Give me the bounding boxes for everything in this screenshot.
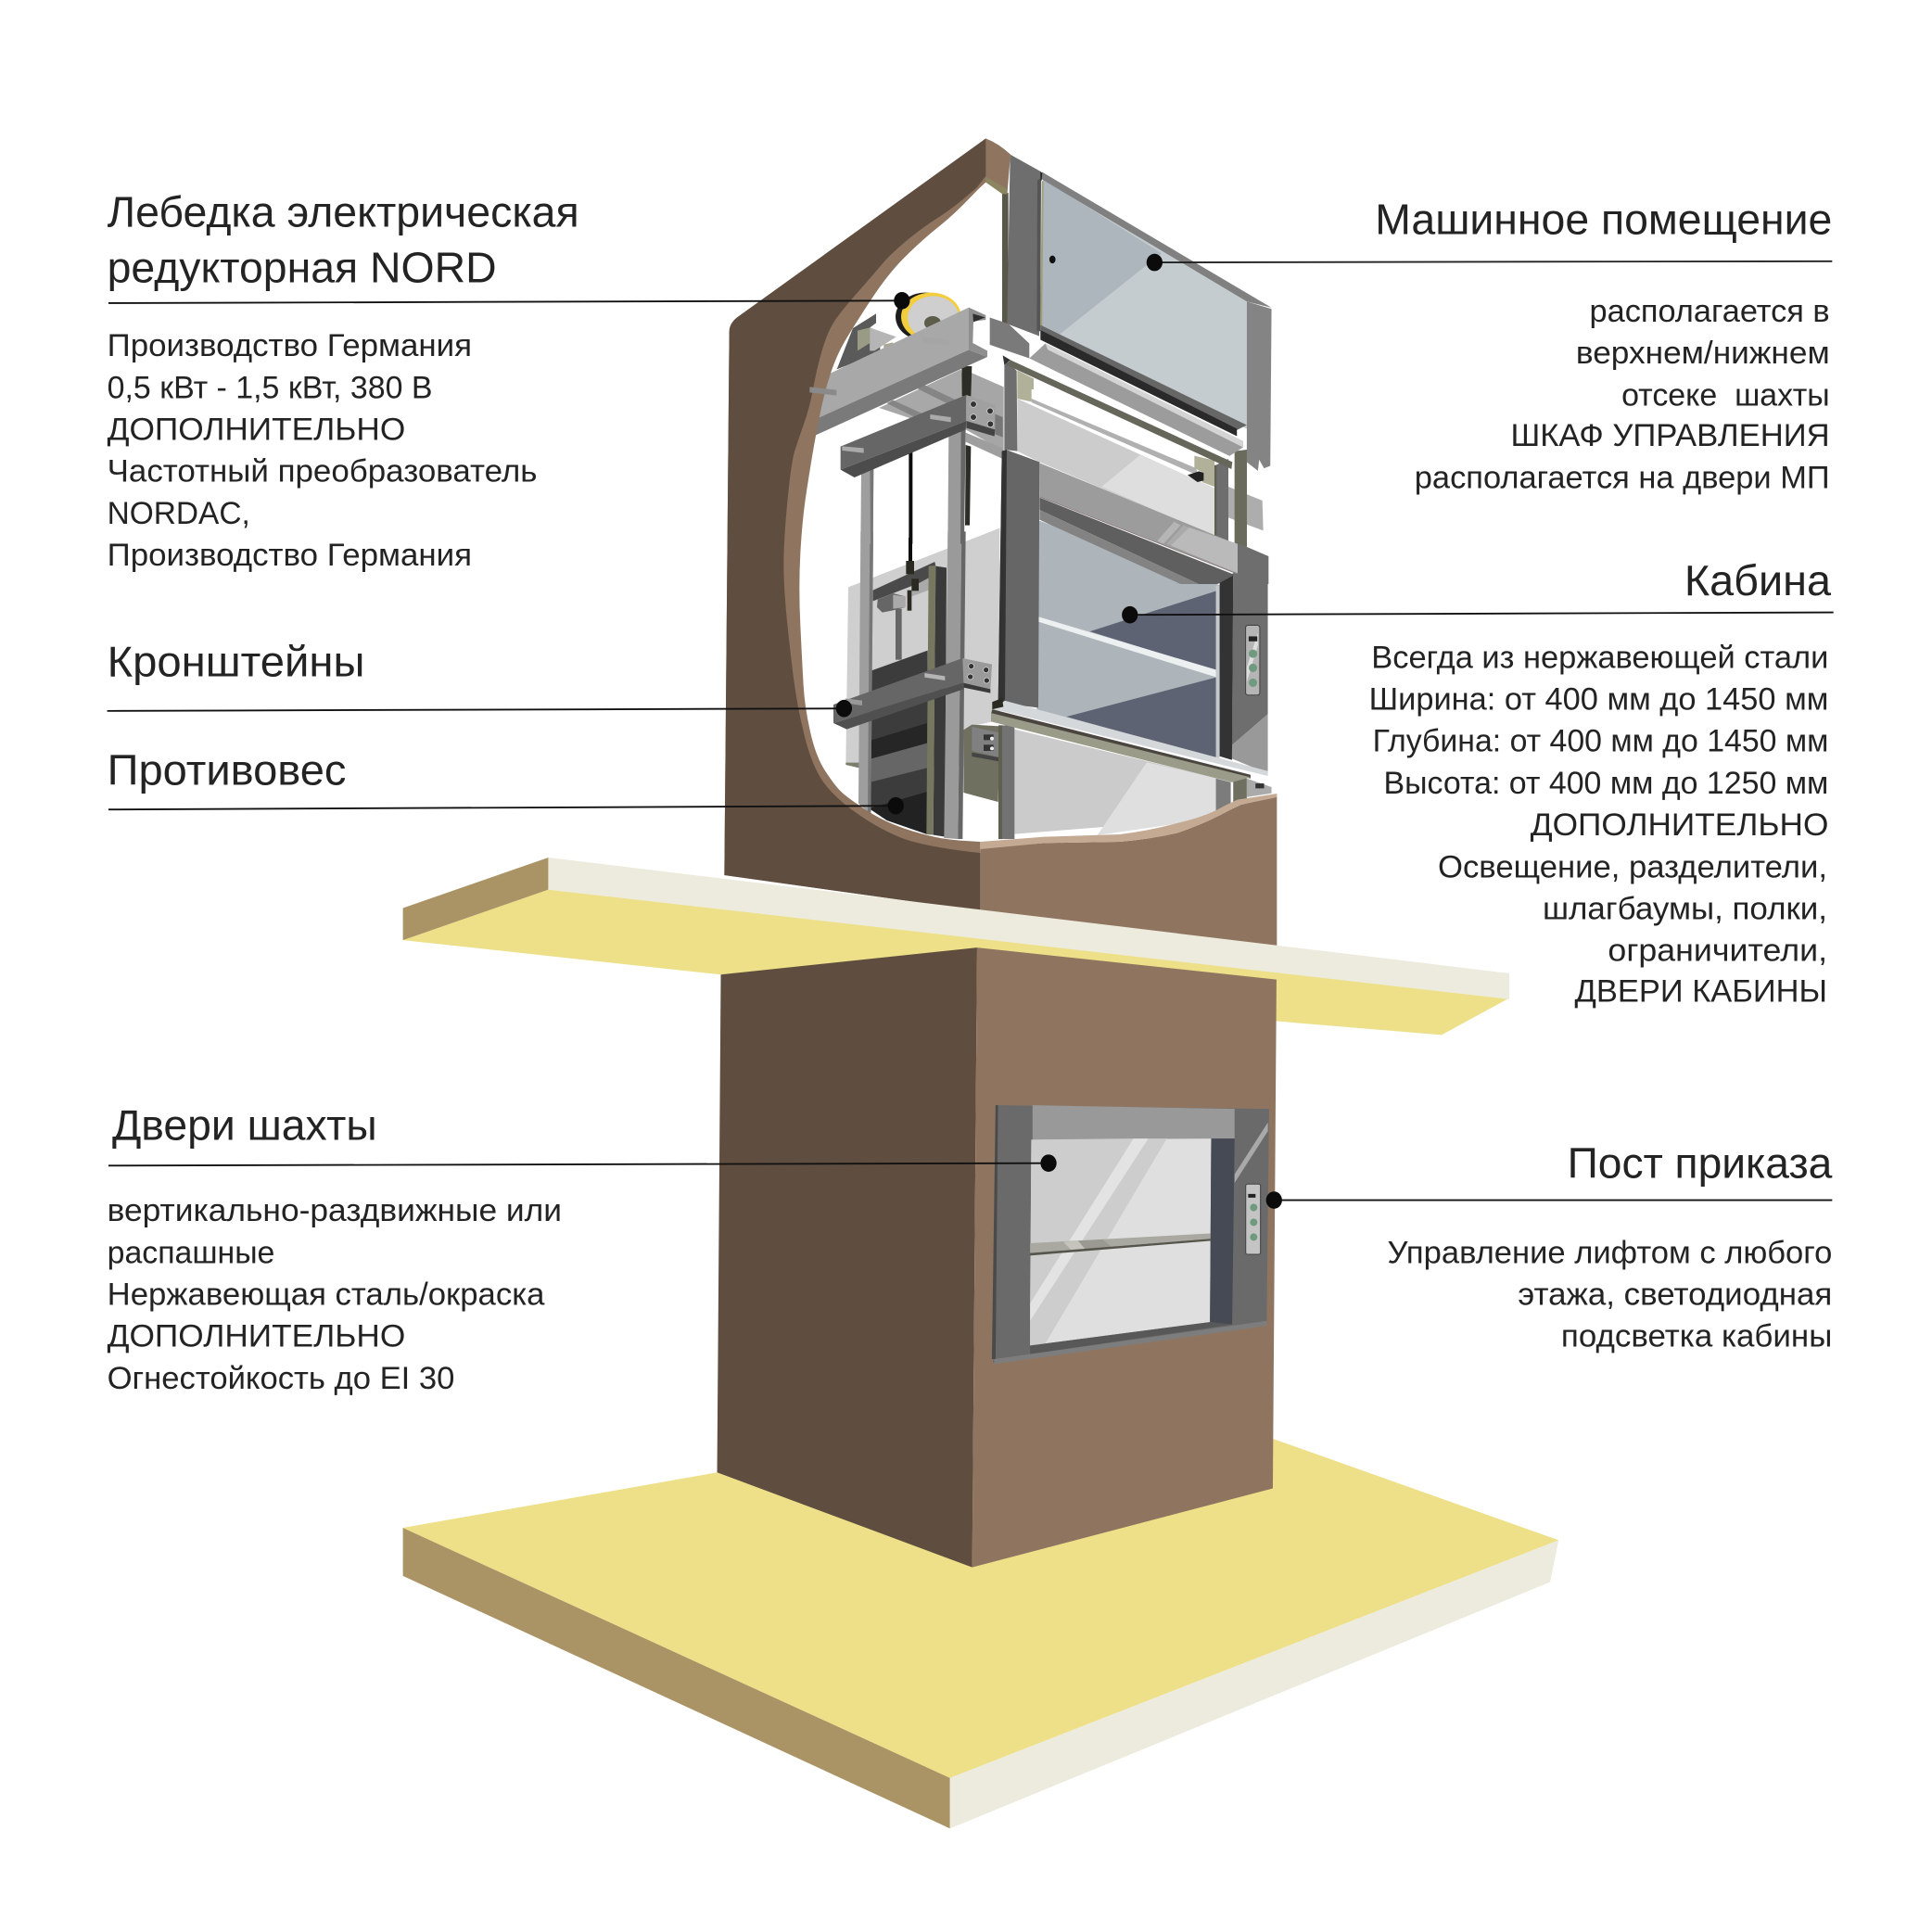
text block: cabin: Кабина bbox=[1684, 556, 1831, 604]
icon: floor call panel bbox=[1246, 1184, 1261, 1254]
door frame post bbox=[1003, 355, 1232, 469]
cabin and lower door in shaft space bbox=[998, 520, 1272, 839]
text block: shaft doors: Огнестойкость до EI 30 bbox=[108, 1361, 454, 1396]
text block: winch: ДОПОЛНИТЕЛЬНО bbox=[108, 412, 405, 447]
text block: machine room: Машинное помещение bbox=[1375, 196, 1832, 244]
cabin sill bbox=[991, 698, 1268, 782]
door interior bbox=[1030, 1138, 1211, 1345]
text block: machine room: верхнем/нижнем bbox=[1576, 336, 1830, 371]
text block: cabin: Всегда из нержавеющей стали bbox=[1371, 640, 1828, 675]
text block: cabin: Высота: от 400 мм до 1250 мм bbox=[1384, 766, 1828, 801]
main channel beam bbox=[809, 308, 987, 438]
left dark wall bbox=[724, 138, 985, 911]
door header bbox=[1033, 1105, 1235, 1139]
text block: call post bbox=[1388, 1139, 1832, 1354]
olive trim under the peak bbox=[985, 177, 1008, 194]
text block: cabin: Освещение, разделители, bbox=[1438, 849, 1827, 884]
cabin side panel bbox=[845, 528, 999, 767]
text block: machine room: располагается в bbox=[1590, 294, 1830, 329]
rear winch bracket bbox=[837, 313, 896, 369]
text block: call post: Пост приказа bbox=[1568, 1139, 1832, 1188]
shaft door bbox=[992, 1105, 1269, 1364]
text block: shaft doors: распашные bbox=[108, 1235, 274, 1270]
right wall bbox=[980, 796, 1277, 949]
leader line: winch bbox=[108, 292, 910, 310]
text block: call post: Управление лифтом с любого bbox=[1388, 1235, 1832, 1270]
leader line: cabin bbox=[1122, 606, 1834, 624]
door bottom bbox=[1030, 1322, 1232, 1354]
text block: cabin: Глубина: от 400 мм до 1450 мм bbox=[1373, 724, 1828, 759]
text block: winch: Производство Германия bbox=[108, 328, 472, 363]
upper door frame and cabin header bbox=[998, 355, 1268, 707]
lower shaft walls bbox=[718, 947, 1277, 1568]
heading: brackets: Кронштейны bbox=[108, 638, 364, 686]
text block: winch bbox=[108, 188, 579, 573]
text block: winch: Производство Германия bbox=[108, 538, 472, 573]
door frame bbox=[993, 1105, 1269, 1363]
leader line: counterweight bbox=[108, 797, 904, 815]
second beam with bolted plate bbox=[841, 395, 995, 477]
elevator mechanism inside the upper shaft bbox=[809, 155, 1272, 839]
text block: shaft doors: вертикально-раздвижные или bbox=[108, 1193, 562, 1228]
text block: shaft doors bbox=[108, 1100, 562, 1396]
text block: shaft doors: Двери шахты bbox=[112, 1100, 377, 1149]
text block: call post: этажа, светодиодная bbox=[1518, 1277, 1832, 1312]
cabin right shoulder bbox=[1238, 544, 1268, 584]
text block: machine room: отсеке шахты bbox=[1621, 377, 1830, 413]
wall bolt bbox=[809, 387, 836, 396]
door right reveal bbox=[1210, 1138, 1235, 1325]
text block: winch: NORDAC, bbox=[108, 496, 250, 531]
text block: winch: редукторная NORD bbox=[108, 243, 497, 291]
light cut edge bbox=[980, 794, 1277, 849]
leader line: brackets bbox=[108, 700, 852, 718]
small bolted plate bbox=[972, 727, 1000, 762]
door handle bar bbox=[1030, 1233, 1216, 1253]
back cross frame bbox=[879, 366, 1004, 459]
lower cabin door panel bbox=[998, 725, 1272, 839]
leader line: machine room bbox=[1147, 254, 1832, 271]
text block: cabin: ограничители, bbox=[1608, 934, 1827, 969]
text block: winch: Частотный преобразователь bbox=[108, 454, 537, 489]
floor slab bbox=[403, 1439, 1558, 1828]
text block: cabin: шлагбаумы, полки, bbox=[1543, 891, 1827, 926]
guide rails upper part bbox=[860, 427, 971, 544]
text block: shaft doors: ДОПОЛНИТЕЛЬНО bbox=[108, 1319, 405, 1354]
leader line: call post bbox=[1266, 1191, 1832, 1209]
top beams and winch bbox=[809, 293, 1004, 544]
text block: cabin: ДОПОЛНИТЕЛЬНО bbox=[1531, 807, 1828, 843]
wall opening edge bbox=[724, 138, 1010, 911]
upper door panel bbox=[1017, 370, 1264, 547]
text block: machine room: располагается на двери МП bbox=[1415, 460, 1830, 495]
middle floor slab bbox=[403, 858, 1509, 1035]
leader line: shaft doors bbox=[108, 1154, 1057, 1172]
icon: yellow winch wheel bbox=[896, 293, 961, 341]
bracket beam bbox=[833, 658, 992, 730]
text block: cabin bbox=[1369, 556, 1831, 1010]
counterweight stack bbox=[871, 538, 947, 837]
machine room cabinet bbox=[990, 155, 1272, 471]
text block: machine room bbox=[1375, 196, 1832, 495]
text block: cabin: ДВЕРИ КАБИНЫ bbox=[1575, 974, 1827, 1010]
machine room and sills bbox=[990, 155, 1272, 782]
text block: cabin: Ширина: от 400 мм до 1450 мм bbox=[1369, 682, 1828, 718]
counterweight, rails and bracket beam bbox=[833, 528, 1000, 839]
cabin header bbox=[1039, 463, 1238, 584]
icon: cabin call panel bbox=[1246, 625, 1260, 695]
text block: call post: подсветка кабины bbox=[1561, 1319, 1832, 1354]
cabin box bbox=[1036, 520, 1268, 773]
heading: counterweight: Противовес bbox=[108, 746, 346, 794]
text block: winch: Лебедка электрическая bbox=[108, 188, 579, 236]
cabin left post bbox=[998, 450, 1039, 707]
text block: winch: 0,5 кВт - 1,5 кВт, 380 В bbox=[108, 370, 433, 405]
lower olive plate bbox=[963, 725, 999, 802]
upper shaft walls bbox=[724, 138, 1277, 949]
text block: shaft doors: Нержавеющая сталь/окраска bbox=[108, 1277, 545, 1312]
text block: machine room: ШКАФ УПРАВЛЕНИЯ bbox=[1510, 418, 1830, 453]
guide rails bbox=[858, 531, 966, 839]
